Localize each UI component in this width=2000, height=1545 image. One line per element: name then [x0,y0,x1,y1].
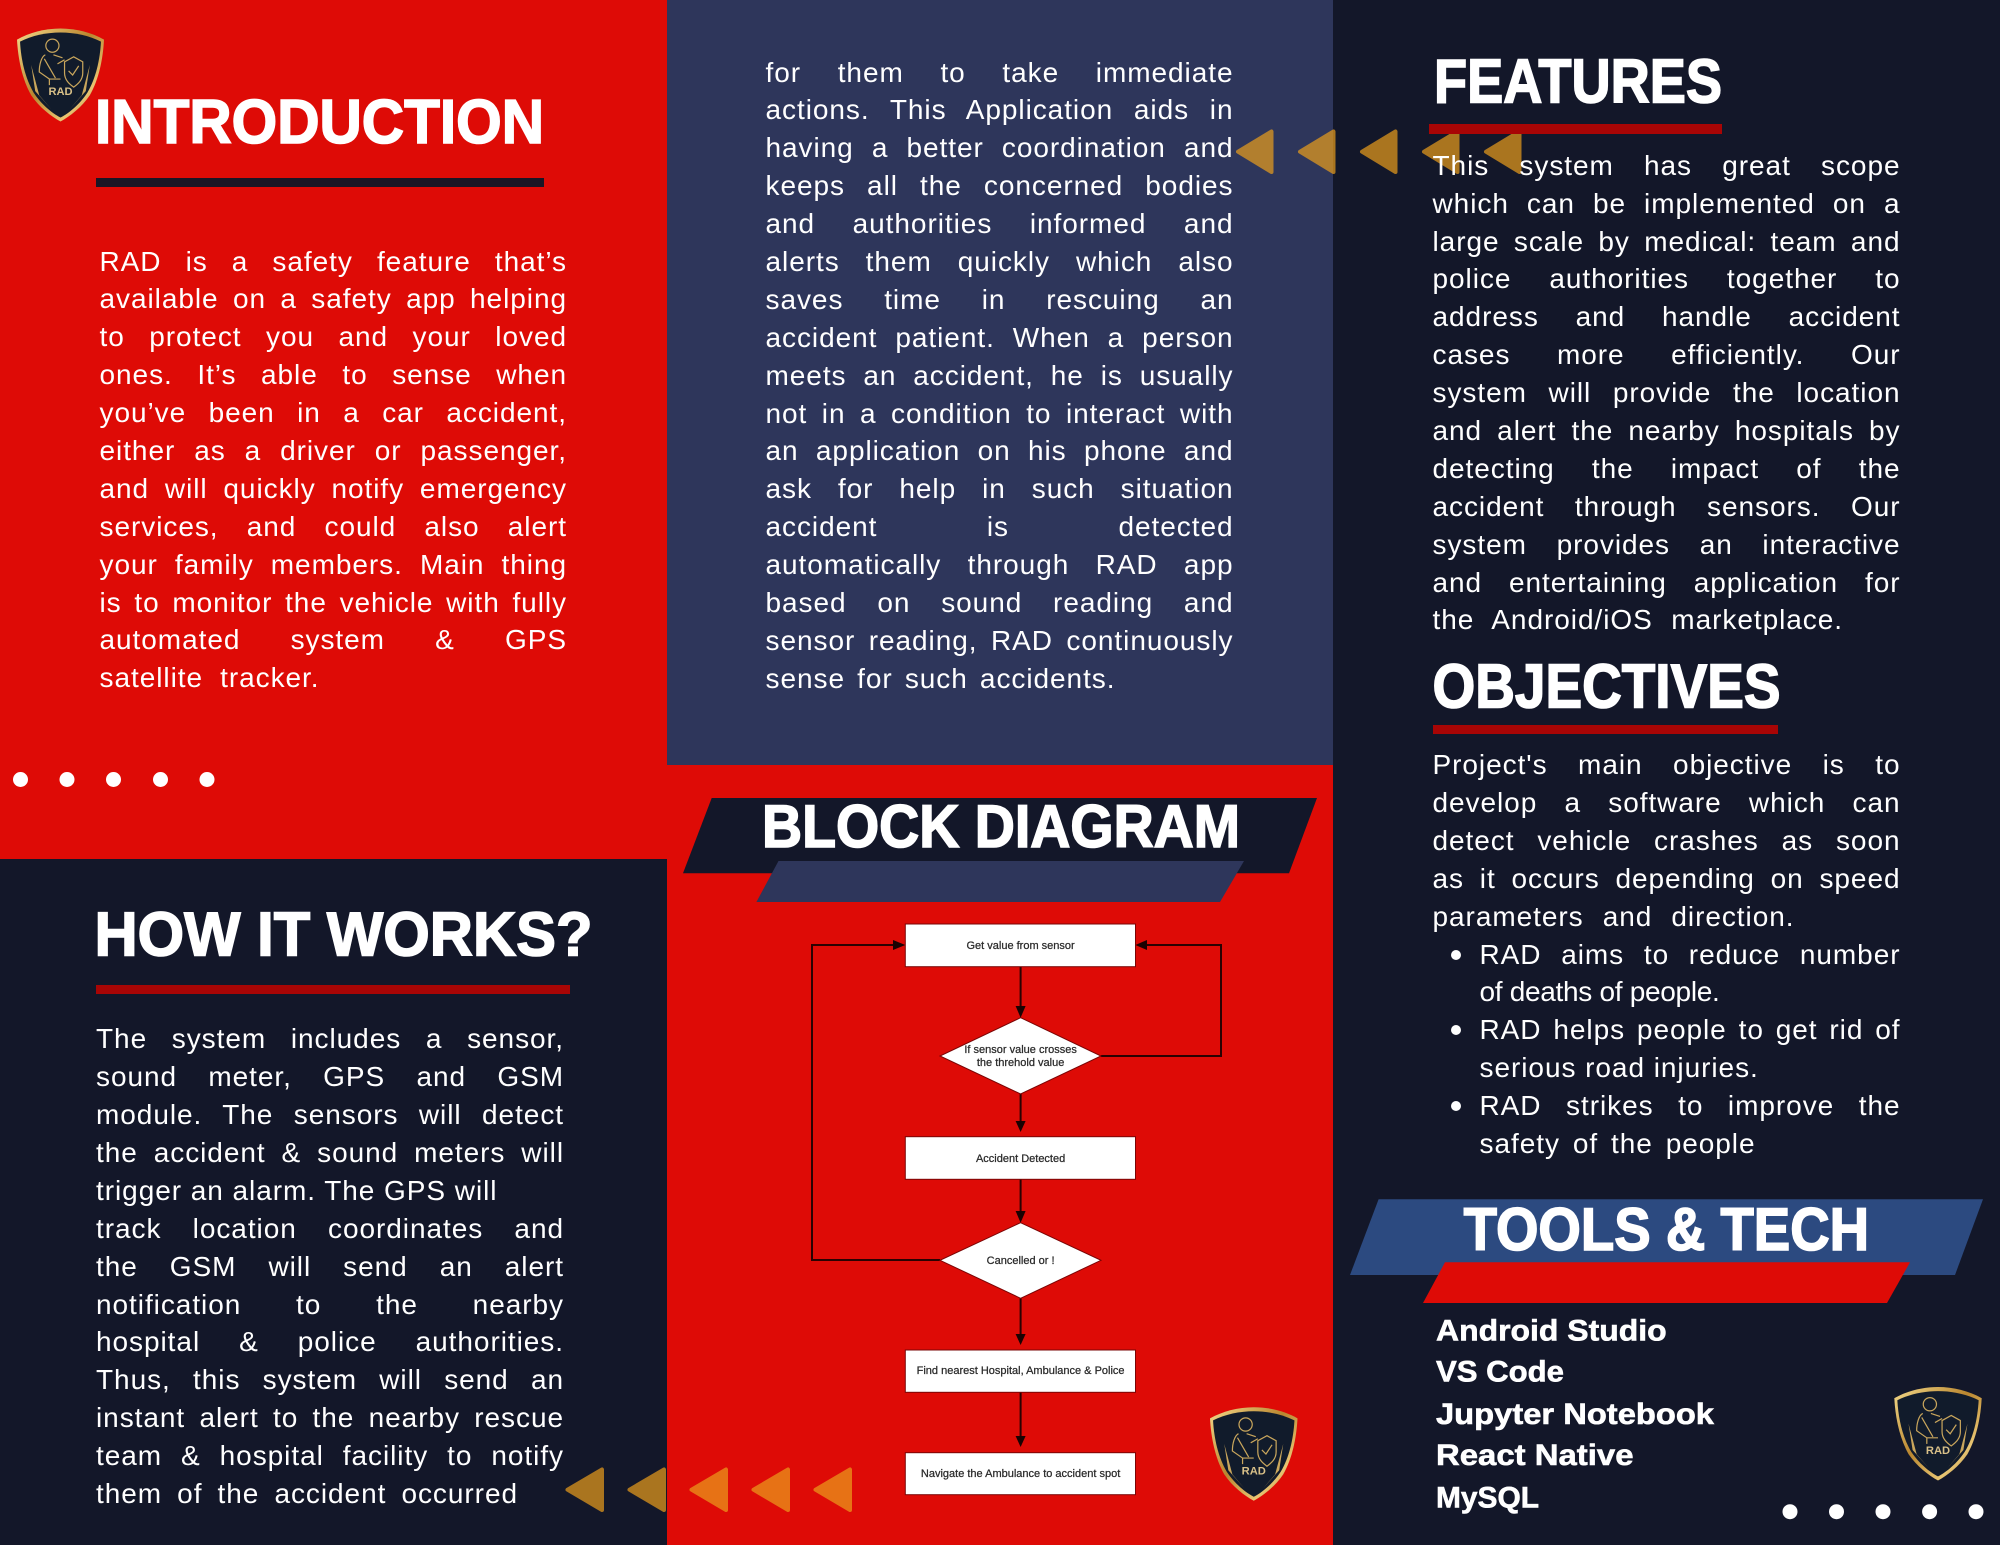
text block: features: police authorities together to [1432,263,1900,294]
text block: how it works: trigger an alarm. The GPS will [96,1175,497,1206]
text block: how it works: the GSM will send an alert [96,1251,564,1282]
text block: features: and entertaining application for [1432,567,1900,598]
text block: introduction continued: accident patient. When a person [766,322,1234,353]
icon: RAD shield logo: RAD [48,86,73,98]
text block: introduction: available on a safety app helping [100,283,567,314]
text block: introduction: either as a driver or passenger, [100,435,567,466]
text block: how it works: sound meter, GPS and GSM [96,1061,564,1092]
text block: introduction continued: based on sound reading and [766,587,1234,618]
bullet list: objectives: serious road injuries. [1480,1052,1759,1083]
text block: features: cases more efficiently. Our [1432,339,1900,370]
heading: how it works: HOW IT WORKS? [94,900,592,970]
panel: block diagram [667,765,1333,1545]
heading: objectives: OBJECTIVES [1432,652,1780,722]
bullet list: objectives: RAD helps people to get rid of [1480,1014,1900,1045]
text block: introduction continued: accident is detected [766,511,1234,542]
heading: features: FEATURES [1434,48,1722,116]
text block: how it works: them of the accident occurred [96,1478,518,1509]
text block: objectives: detect vehicle crashes as soon [1432,825,1900,856]
text block: introduction: ones. It’s able to sense when [100,359,567,390]
flowchart: the threhold value [977,1057,1064,1069]
list: tools and technologies: React Native [1436,1439,1634,1472]
icon: RAD shield logo [1894,1387,1982,1480]
text block: introduction continued: actions. This Application aids in [766,94,1234,125]
panel: features, objectives and tools [1333,0,2000,1545]
panel: introduction [0,0,667,859]
list: tools and technologies: Android Studio [1436,1315,1667,1348]
flowchart: If sensor value crosses [964,1044,1077,1056]
text block: objectives: parameters and direction. [1432,901,1794,932]
banner: block diagram heading: BLOCK DIAGRAM [762,793,1240,860]
text block: how it works: track location coordinates and [96,1213,564,1244]
text block: introduction continued [766,56,1234,694]
banner: tools and tech heading: TOOLS & TECH [1464,1196,1869,1263]
icon: RAD shield logo: RAD [1241,1465,1265,1477]
flowchart: Get value from sensor [966,940,1075,952]
arrows: top row pointing left [1236,129,1522,174]
text block: introduction continued: keeps all the concerned bodies [766,170,1234,201]
flowchart [811,924,1222,1496]
banner: block diagram heading [683,793,1317,902]
text block: introduction: satellite tracker. [100,662,320,693]
text block: features: and alert the nearby hospitals by [1432,415,1900,446]
bullet list: objectives: safety of the people [1480,1128,1756,1159]
heading: introduction: INTRODUCTION [95,88,544,157]
text block: how it works: team & hospital facility to notify [96,1440,564,1471]
text block: introduction: RAD is a safety feature that’s [100,246,567,276]
list: tools and technologies [1436,1315,1714,1515]
divider bar under introduction [96,178,544,187]
flowchart: Navigate the Ambulance to accident spot [921,1468,1120,1480]
panel: how it works [0,859,667,1545]
text block: introduction continued: and authorities informed and [766,208,1234,239]
text block: introduction continued: for them to take immediate [766,56,1234,88]
arrows: bottom row pointing left [565,1467,852,1512]
bullet list: objectives: of deaths of people. [1480,976,1720,1007]
text block: how it works: module. The sensors will detect [96,1099,564,1130]
text block: introduction continued: alerts them quickly which also [766,246,1234,277]
text block: introduction continued: an application on his phone and [766,435,1234,466]
text block: introduction continued: ask for help in such situation [766,473,1234,504]
icon: RAD shield logo [17,28,104,122]
text block: features: the Android/iOS marketplace. [1432,604,1843,635]
icon: RAD shield logo [1210,1407,1298,1501]
divider bar under how it works [96,985,570,994]
icon: RAD shield logo: RAD [1926,1445,1950,1457]
flowchart: Find nearest Hospital, Ambulance & Police [917,1365,1125,1377]
bullet list: objectives [1451,938,1900,1159]
text block: introduction continued: not in a condition to interact with [766,398,1234,429]
list: tools and technologies: VS Code [1436,1356,1564,1389]
text block: how it works: hospital & police authorities. [96,1326,564,1357]
divider bar under features [1428,124,1722,134]
text block: how it works: instant alert to the nearby rescue [96,1402,564,1433]
divider bar under objectives [1432,724,1778,734]
decorative dots [1782,1504,1984,1520]
text block: introduction: your family members. Main thing [100,549,567,580]
text block: features: detecting the impact of the [1432,453,1900,484]
flowchart: Accident Detected [976,1153,1065,1165]
text block: introduction: is to monitor the vehicle with fully [100,587,567,618]
text block: features: which can be implemented on a [1432,188,1900,219]
text block: introduction continued: having a better coordination and [766,132,1234,163]
text block: features [1432,150,1900,635]
text block: how it works: Thus, this system will send an [96,1364,564,1395]
text block: objectives: Project's main objective is to [1432,749,1900,780]
text block: how it works [96,1023,564,1509]
text block: objectives: as it occurs depending on speed [1432,863,1900,894]
text block: features: large scale by medical: team and [1432,226,1900,257]
bullet list: objectives: RAD strikes to improve the [1480,1090,1900,1121]
text block: introduction: and will quickly notify emergency [100,473,567,504]
text block: introduction continued: saves time in rescuing an [766,284,1234,315]
text block: introduction continued: sense for such accidents. [766,663,1116,694]
bullet list: objectives: RAD aims to reduce number [1480,938,1900,970]
text block: how it works: The system includes a sensor, [96,1023,564,1054]
text block: introduction [100,246,567,693]
banner: tools and tech heading [1350,1196,1983,1303]
panel: introduction continued [667,0,1333,765]
flowchart: Cancelled or ! [987,1255,1055,1267]
text block: how it works: the accident & sound meters will [96,1137,564,1168]
text block: introduction continued: automatically through RAD app [766,549,1234,580]
text block: introduction: services, and could also alert [100,511,567,542]
text block: features: address and handle accident [1432,301,1900,332]
text block: introduction continued: meets an accident, he is usually [766,360,1234,391]
text block: introduction: automated system & GPS [100,624,567,655]
text block: introduction: to protect you and your loved [100,321,567,352]
text block: objectives: develop a software which can [1432,787,1900,818]
text block: features: This system has great scope [1432,150,1900,181]
text block: objectives [1432,749,1900,932]
list: tools and technologies: MySQL [1436,1482,1539,1515]
text block: introduction: you’ve been in a car accident, [100,397,567,428]
text block: introduction continued: sensor reading, RAD continuously [766,625,1234,656]
decorative dots [13,772,214,787]
text block: features: system provides an interactive [1432,529,1900,560]
text block: how it works: notification to the nearby [96,1289,564,1320]
text block: features: system will provide the location [1432,377,1900,408]
text block: features: accident through sensors. Our [1432,491,1900,522]
list: tools and technologies: Jupyter Notebook [1436,1398,1714,1431]
